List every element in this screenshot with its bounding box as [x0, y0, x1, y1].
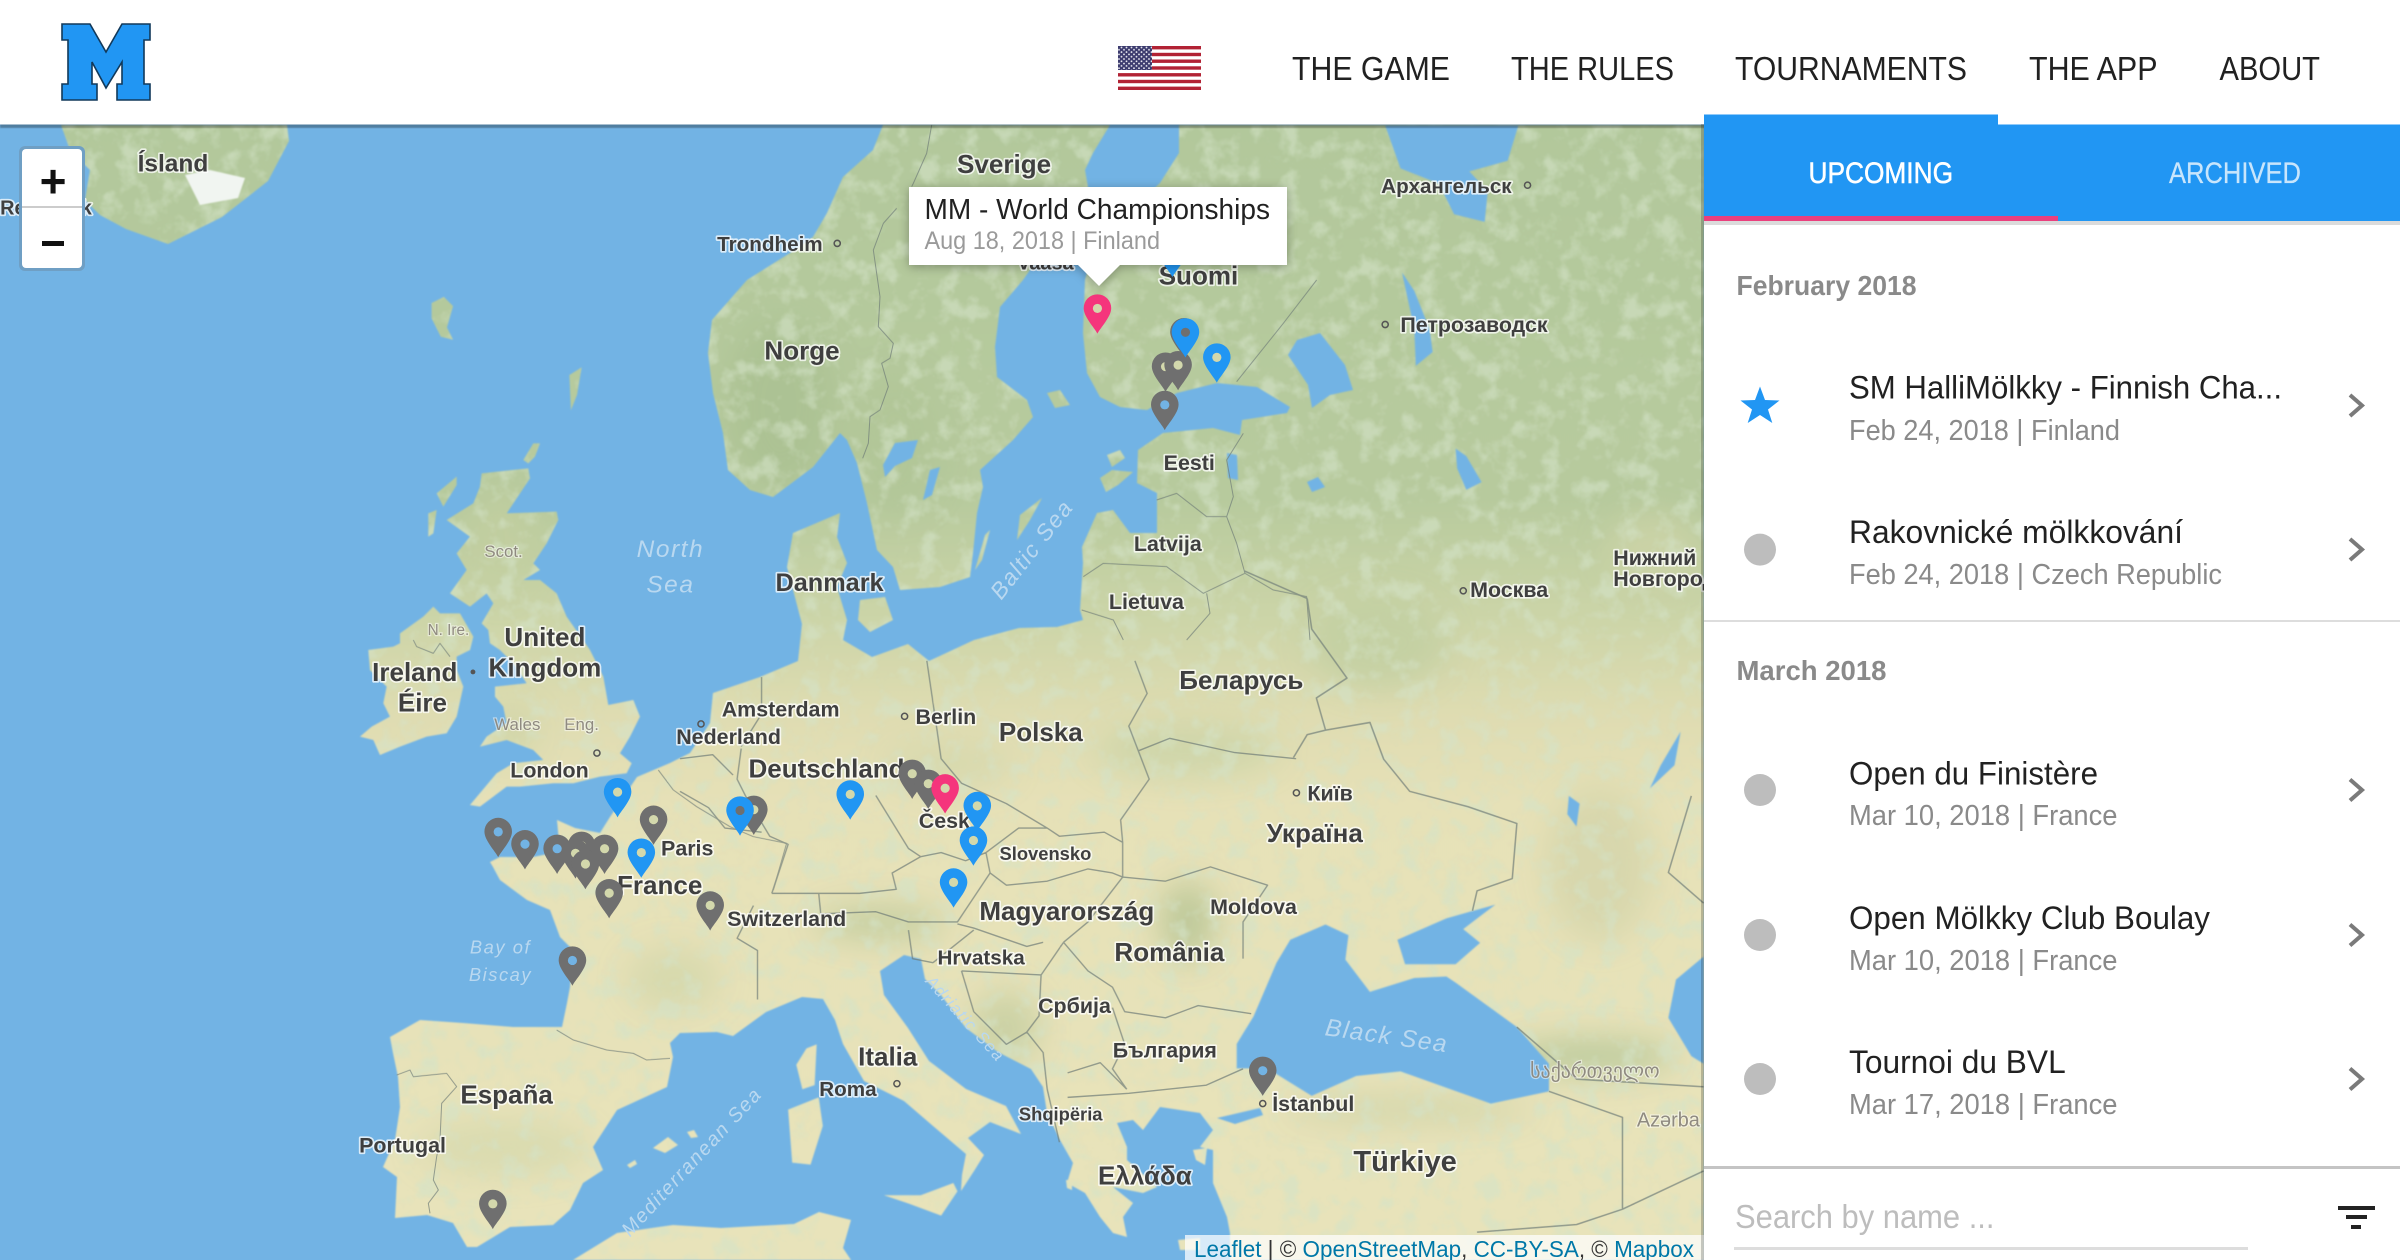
map place labels: London: [510, 759, 589, 783]
map place labels: Kingdom: [489, 653, 601, 683]
map place labels: Ísland: [138, 149, 208, 177]
map place labels: România: [1114, 937, 1225, 967]
map place labels: North: [637, 536, 704, 563]
heading: February 2018: February 2018: [1736, 270, 1916, 301]
list item: Open du Finistère: Open du Finistère: [1849, 756, 2098, 792]
zoom control: [19, 146, 85, 271]
list item: Open du Finistère: [1744, 756, 2362, 832]
map place labels: Paris: [661, 837, 714, 861]
map place labels: Беларусь: [1179, 665, 1303, 695]
heading: March 2018: March 2018: [1736, 655, 1886, 686]
map place labels: Baltic Sea: [985, 494, 1078, 604]
search bar: [1704, 1166, 2400, 1260]
list item: Open du Finistère: Mar 10, 2018 | France: [1849, 800, 2118, 832]
search bar: Search by name ...: [1735, 1198, 1994, 1235]
map place labels: Lietuva: [1109, 590, 1185, 614]
list item: SM HalliMölkky: Feb 24, 2018 | Finland: [1849, 415, 2120, 447]
list item: Open Mölkky Club Boulay: Mar 10, 2018 | France: [1849, 945, 2118, 977]
land masses: [0, 120, 1710, 1260]
map place labels: Київ: [1307, 782, 1353, 806]
tournament pins: grey: [479, 318, 1277, 1229]
popup: World Championships: Aug 18, 2018 | Finland: [924, 227, 1160, 255]
map place labels: Danmark: [776, 569, 885, 597]
popup: World Championships: [909, 187, 1287, 286]
map place labels: Moldova: [1210, 895, 1298, 919]
map place labels: Eesti: [1164, 451, 1215, 475]
map panel: [0, 124, 1779, 1260]
map place labels: Reykjavík: [0, 197, 93, 219]
navigation: [1292, 50, 2320, 87]
map place labels: Sverige: [957, 149, 1051, 179]
tab bar: [1704, 124, 2400, 225]
map place labels: Nederland: [676, 725, 781, 749]
map place labels: [0, 149, 1717, 1241]
map place labels: Україна: [1267, 818, 1363, 848]
navigation: TOURNAMENTS: [1735, 50, 1967, 87]
map place labels: United: [504, 622, 585, 652]
map place labels: Trondheim: [717, 233, 823, 256]
map place labels: Switzerland: [727, 907, 846, 931]
list item: Tournoi du BVL: Tournoi du BVL: [1849, 1044, 2066, 1080]
map place labels: Новгород: [1613, 567, 1717, 591]
map place labels: Polska: [999, 717, 1083, 747]
map place labels: Eng.: [564, 715, 599, 734]
navigation: THE RULES: [1511, 50, 1674, 87]
map place labels: España: [460, 1080, 553, 1110]
map place labels: Архангельск: [1381, 175, 1512, 198]
map place labels: Suomi: [1159, 261, 1238, 291]
list item: SM HalliMölkky: [1740, 370, 2362, 447]
map place labels: Portugal: [359, 1134, 446, 1158]
map place labels: Latvija: [1134, 532, 1203, 556]
map place labels: Adriatic Sea: [921, 971, 1009, 1066]
tournament pins: blue: [604, 238, 1231, 908]
map place labels: Éire: [398, 688, 447, 718]
map place labels: Türkiye: [1353, 1146, 1457, 1178]
map place labels: Slovensko: [999, 843, 1091, 864]
navigation: THE APP: [2029, 50, 2158, 87]
map place labels: Biscay: [469, 964, 532, 985]
map place labels: Azərba: [1637, 1110, 1701, 1132]
map place labels: Mediterranean Sea: [617, 1083, 767, 1241]
inland and enclosed seas: [883, 126, 1704, 1124]
popup: World Championships: MM - World Championships: [924, 194, 1270, 226]
list item: Rakovnické mölkkování: [1744, 514, 2362, 591]
map place labels: Петрозаводск: [1400, 313, 1548, 337]
map place labels: İstanbul: [1272, 1092, 1354, 1116]
map place labels: Ελλάδα: [1098, 1161, 1192, 1191]
country borders: [397, 125, 1704, 1232]
map place labels: Italia: [858, 1041, 918, 1071]
map place labels: Hrvatska: [937, 946, 1025, 969]
map place labels: Black Sea: [1323, 1014, 1450, 1058]
map place labels: Norge: [764, 336, 840, 366]
map place labels: N. Ire.: [428, 622, 469, 639]
map place labels: Magyarország: [979, 896, 1154, 926]
map place labels: Wales: [494, 715, 540, 734]
map place labels: Česk: [919, 808, 970, 833]
list item: Rakovnické mölkkování: Rakovnické mölkkování: [1849, 514, 2183, 550]
map place labels: Deutschland: [748, 754, 905, 784]
map place labels: Нижний: [1613, 546, 1696, 570]
map place labels: საქართველო: [1530, 1061, 1660, 1083]
map place labels: Amsterdam: [722, 697, 839, 721]
list item: SM HalliMölkky: SM HalliMölkky - Finnish Cha...: [1849, 370, 2282, 406]
tab bar: ARCHIVED: [2169, 157, 2301, 190]
map place labels: France: [617, 870, 702, 900]
map place labels: Ireland: [372, 657, 457, 687]
list item: Tournoi du BVL: Mar 17, 2018 | France: [1849, 1089, 2118, 1121]
map place labels: Bay of: [470, 937, 531, 958]
map place labels: Shqipëria: [1019, 1103, 1103, 1124]
language flag: [1118, 46, 1201, 90]
map place labels: Sea: [646, 571, 694, 598]
list item: Open Mölkky Club Boulay: [1744, 900, 2362, 977]
tournament pins: pink: [931, 294, 1111, 814]
map place labels: Scot.: [484, 542, 523, 561]
map place labels: Berlin: [916, 705, 976, 729]
header bar: [0, 0, 2400, 128]
map place labels: Москва: [1470, 578, 1549, 602]
map place labels: Roma: [819, 1078, 877, 1101]
list item: Tournoi du BVL: [1744, 1044, 2362, 1121]
list item: Open Mölkky Club Boulay: Open Mölkky Club Boulay: [1849, 900, 2210, 936]
map place labels: Србија: [1038, 994, 1112, 1018]
logo M: [62, 24, 150, 100]
active nav indicator: [1704, 114, 1998, 126]
icon: filter: [2338, 1206, 2375, 1229]
tab bar: UPCOMING: [1808, 157, 1953, 190]
navigation: ABOUT: [2220, 50, 2320, 87]
panel: tournament sidebar: [1701, 114, 2400, 1260]
map place labels: Vaasa: [1017, 252, 1075, 274]
navigation: THE GAME: [1292, 50, 1450, 87]
map place labels: България: [1113, 1039, 1217, 1063]
zoom control: +: [40, 155, 66, 207]
glaciers: [185, 170, 245, 205]
list item: Rakovnické mölkkování: Feb 24, 2018 | Czech Republic: [1849, 559, 2222, 591]
